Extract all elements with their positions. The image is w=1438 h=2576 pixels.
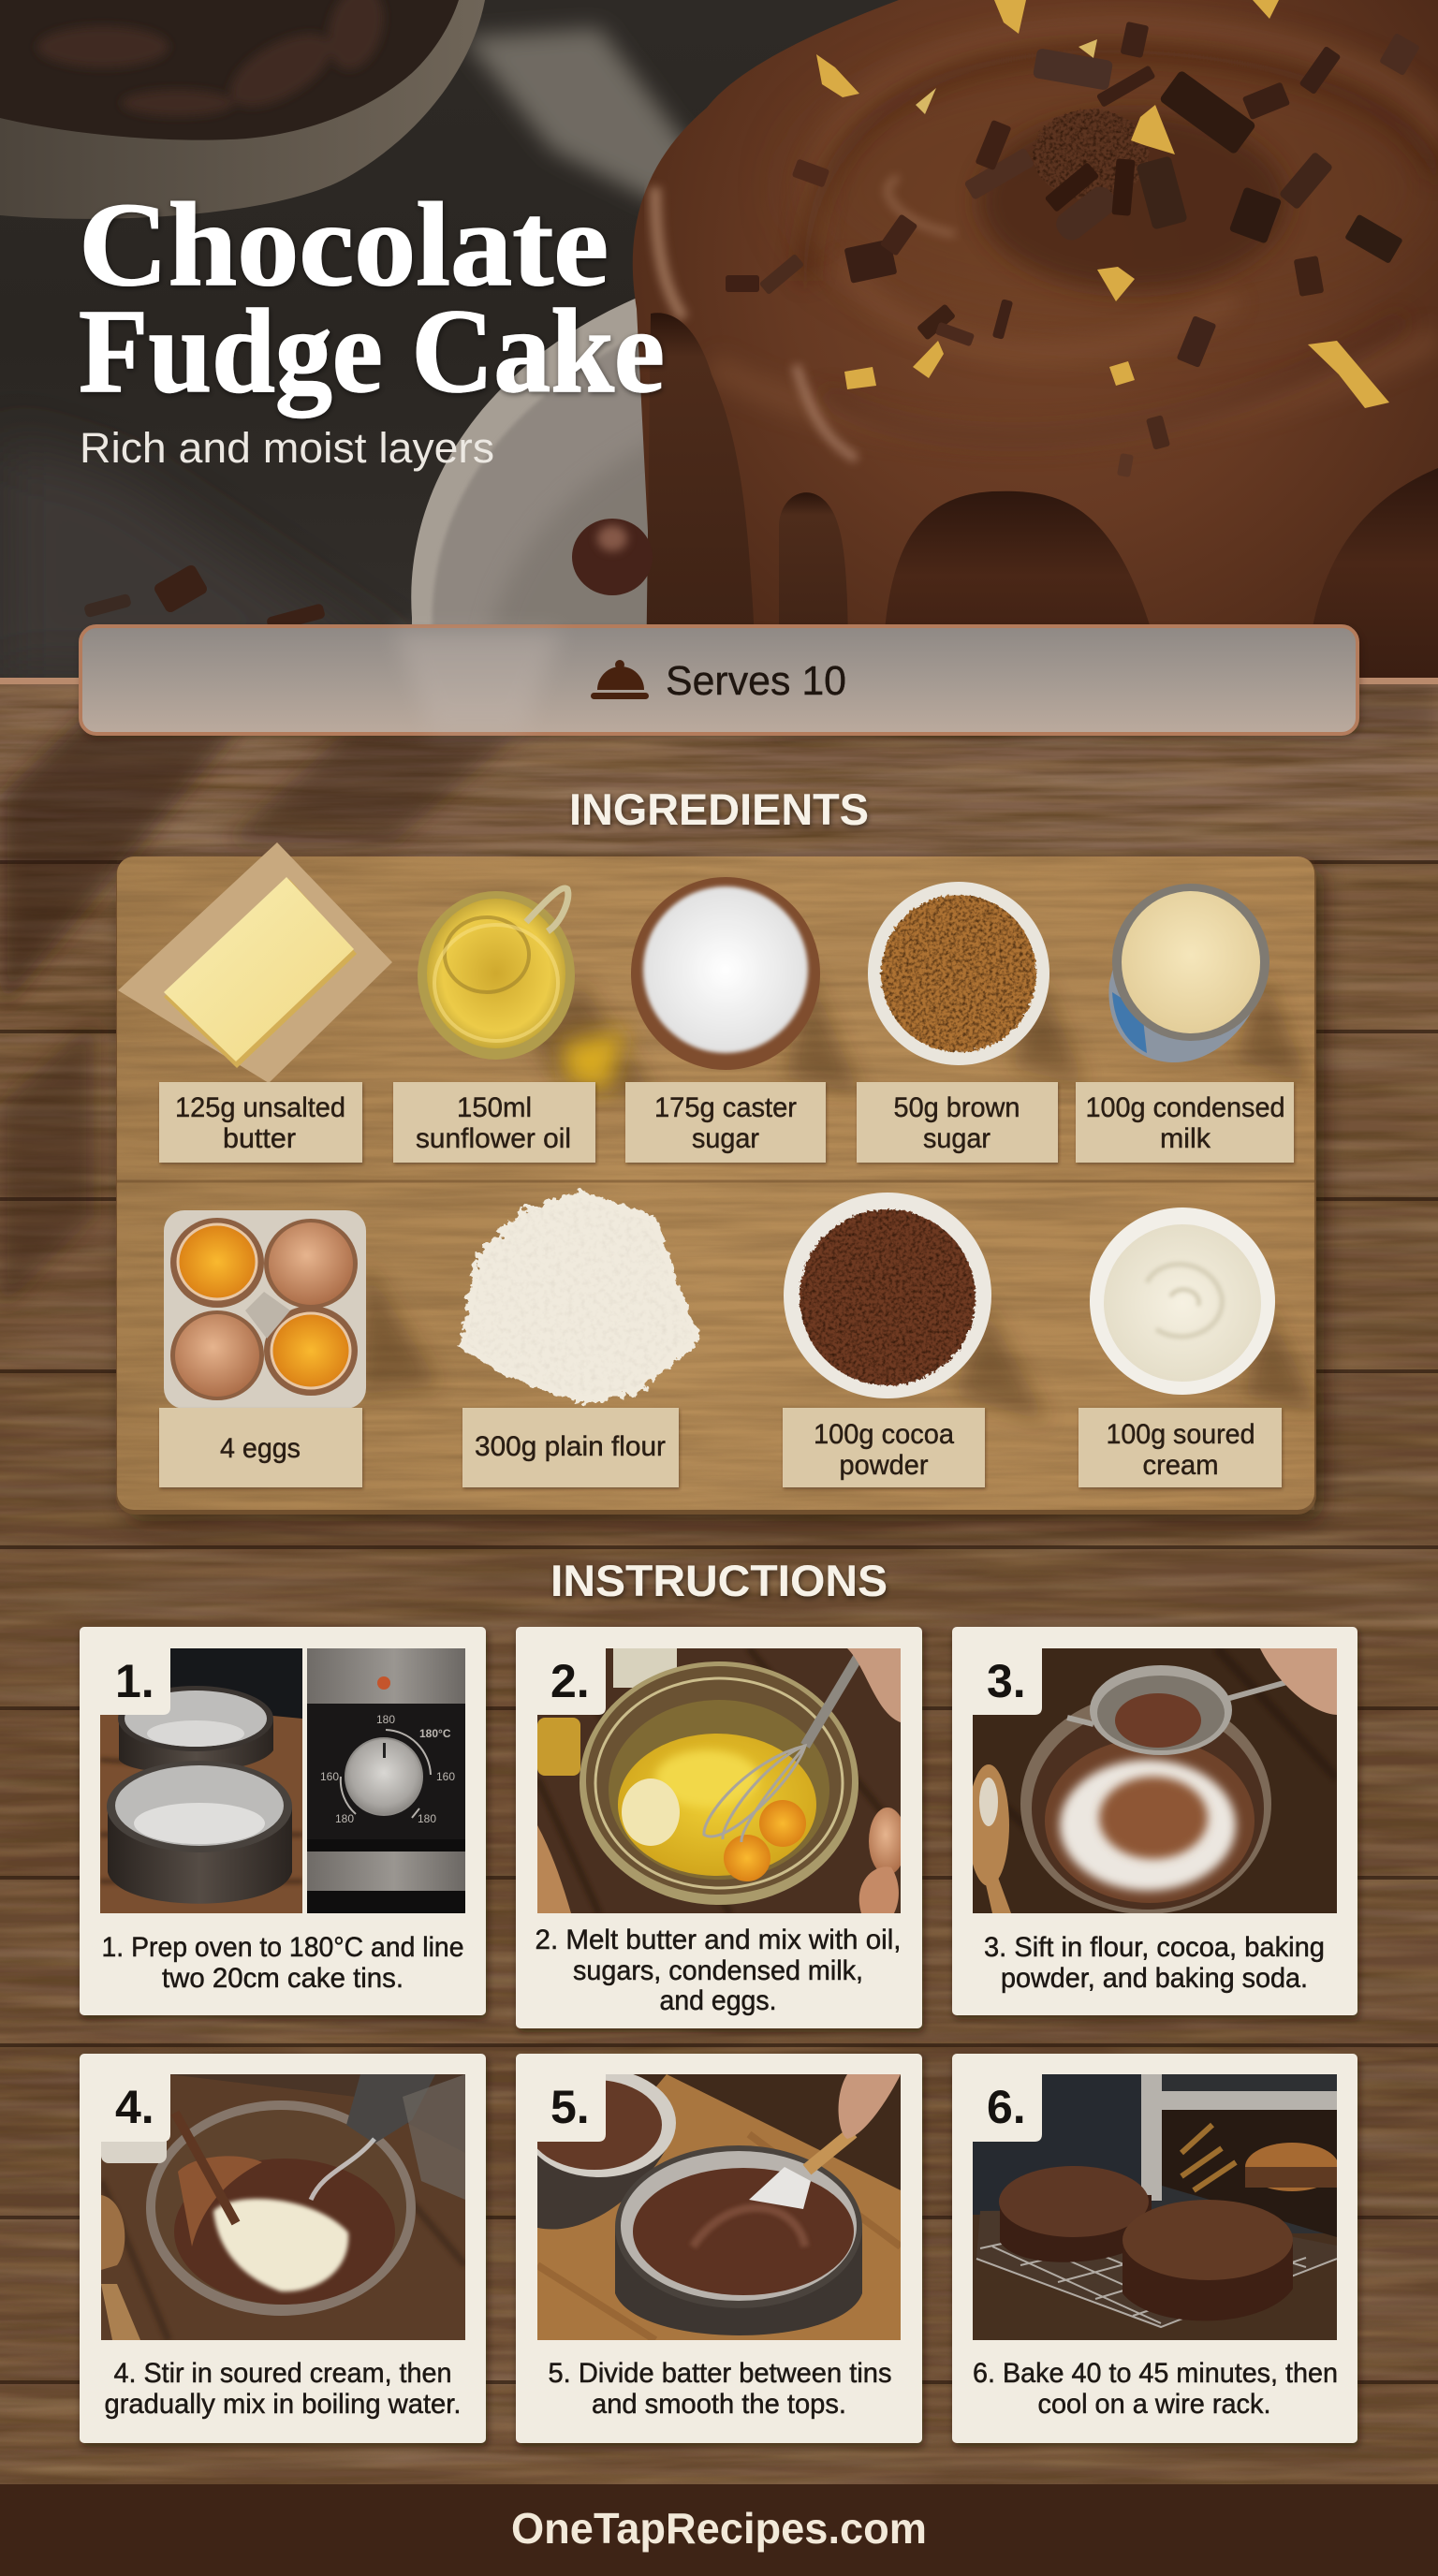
table light band	[463, 28, 712, 201]
step card 2	[516, 1627, 922, 2028]
step card 6	[952, 2054, 1357, 2443]
step text: sugars, condensed milk,	[573, 1955, 863, 1986]
label chips row 1: 150ml	[457, 1092, 532, 1123]
step card 4	[80, 2054, 486, 2443]
photo: sifting flour and cocoa	[968, 1648, 1337, 1914]
label chips row 1: milk	[1160, 1123, 1211, 1154]
step text: 4. Stir in soured cream, then	[114, 2358, 451, 2389]
label chips row 1: 100g condensed	[1086, 1092, 1284, 1123]
step number badge	[966, 1643, 1042, 1715]
photo: dividing batter into tins	[522, 2069, 901, 2340]
item: caster sugar bowl	[631, 877, 820, 1070]
step number badge: 1.	[115, 1655, 154, 1707]
serves pill: Serves 10	[666, 658, 846, 704]
title: Chocolate	[79, 178, 609, 311]
label chips row 2: 300g plain flour	[475, 1431, 666, 1462]
step number badge	[530, 1643, 606, 1715]
step text: cool on a wire rack.	[1037, 2389, 1271, 2420]
photo: mixing butter and eggs	[537, 1648, 906, 1913]
step text: and smooth the tops.	[592, 2389, 846, 2420]
label chips row 2: cream	[1142, 1450, 1219, 1481]
step text	[549, 2358, 891, 2420]
photo: oven dial: 160	[436, 1770, 455, 1783]
item: sunflower oil jug	[418, 888, 625, 1090]
step text: gradually mix in boiling water.	[105, 2389, 461, 2420]
step number badge	[94, 2069, 170, 2142]
photo: stirring in soured cream	[101, 2074, 465, 2340]
wood table background	[0, 674, 1438, 2576]
item: plain flour pile	[459, 1191, 702, 1404]
label chips row 2: powder	[839, 1450, 929, 1481]
step text	[101, 1932, 464, 1994]
step text: two 20cm cake tins.	[162, 1963, 404, 1994]
step number badge	[966, 2069, 1042, 2142]
label chips row 1: sunflower oil	[416, 1123, 571, 1154]
step card 5	[516, 2054, 922, 2443]
serves pill	[80, 625, 1358, 735]
step text	[105, 2358, 461, 2420]
step text: powder, and baking soda.	[1001, 1963, 1308, 1994]
label chips row 1: butter	[223, 1123, 296, 1154]
photo: lined tins	[100, 1648, 302, 1913]
dark cake crumb arches between drips	[646, 313, 754, 624]
heading: ingredients: INGREDIENTS	[569, 784, 869, 834]
heading: instructions: INSTRUCTIONS	[550, 1556, 888, 1605]
step number badge	[94, 1643, 170, 1715]
step number badge: 4.	[115, 2081, 154, 2133]
step number badge: 6.	[987, 2081, 1026, 2133]
step card 1	[80, 1627, 486, 2015]
label chips row 1: sugar	[923, 1123, 990, 1154]
bowl of chocolate shavings	[0, 0, 485, 219]
item: condensed milk can	[1108, 884, 1269, 1062]
photo: oven dial: 180	[335, 1812, 354, 1825]
photo: baked cakes on wire rack	[973, 2074, 1339, 2340]
step card 3	[952, 1627, 1357, 2015]
copper edge line under hero	[0, 678, 1438, 684]
soft item shadows on board	[356, 964, 1320, 1423]
step number badge: 5.	[550, 2081, 590, 2133]
label chips row 1: 50g brown	[893, 1092, 1020, 1123]
chocolate shavings and gold leaf	[726, 0, 1420, 477]
label chips row 2	[159, 1408, 1282, 1487]
step text: 3. Sift in flour, cocoa, baking	[984, 1932, 1325, 1963]
step text: 2. Melt butter and mix with oil,	[536, 1925, 901, 1955]
photo: oven dial: 180	[376, 1713, 395, 1726]
label chips row 1: sugar	[692, 1123, 759, 1154]
panel: cutting board with ingredients	[116, 842, 1324, 1521]
plate	[411, 299, 648, 624]
label chips row 1: 175g caster	[654, 1092, 797, 1123]
title	[79, 178, 665, 417]
footer bar	[0, 2484, 1438, 2576]
hero photo: chocolate cake	[0, 0, 1438, 680]
item: egg carton	[164, 1210, 366, 1409]
step text: 5. Divide batter between tins	[549, 2358, 891, 2389]
label chips row 1: 125g unsalted	[175, 1092, 345, 1123]
step text	[536, 1925, 901, 2016]
photo: oven dial	[307, 1648, 465, 1913]
item: brown sugar bowl	[868, 882, 1049, 1065]
photo: oven dial: 180°C	[419, 1727, 451, 1740]
photo: oven dial: 160	[320, 1770, 339, 1783]
subtitle: Rich and moist layers	[80, 424, 494, 472]
step number badge	[530, 2069, 606, 2142]
step text	[973, 2358, 1338, 2420]
item: soured cream bowl	[1090, 1208, 1275, 1395]
item: cocoa powder bowl	[784, 1193, 991, 1398]
step text: 1. Prep oven to 180°C and line	[101, 1932, 464, 1963]
photo: oven dial: 180	[418, 1812, 436, 1825]
step text: 6. Bake 40 to 45 minutes, then	[973, 2358, 1338, 2389]
step number badge: 2.	[550, 1655, 590, 1707]
title: Fudge Cake	[79, 285, 665, 417]
step text: and eggs.	[659, 1985, 777, 2016]
label chips row 2: 4 eggs	[220, 1433, 301, 1464]
step text	[984, 1932, 1325, 1994]
icon: serving cloche	[591, 660, 649, 699]
fudge frosting	[633, 0, 1438, 680]
label chips row 2: 100g cocoa	[814, 1419, 954, 1450]
label chips row 1	[159, 1082, 1294, 1163]
label chips row 2: 100g soured	[1107, 1419, 1255, 1450]
footer bar: OneTapRecipes.com	[511, 2504, 927, 2553]
chocolate crumbs on table	[84, 565, 325, 624]
step number badge: 3.	[987, 1655, 1026, 1707]
chocolate drop on plate	[572, 519, 653, 595]
item: butter on parchment	[118, 842, 392, 1083]
